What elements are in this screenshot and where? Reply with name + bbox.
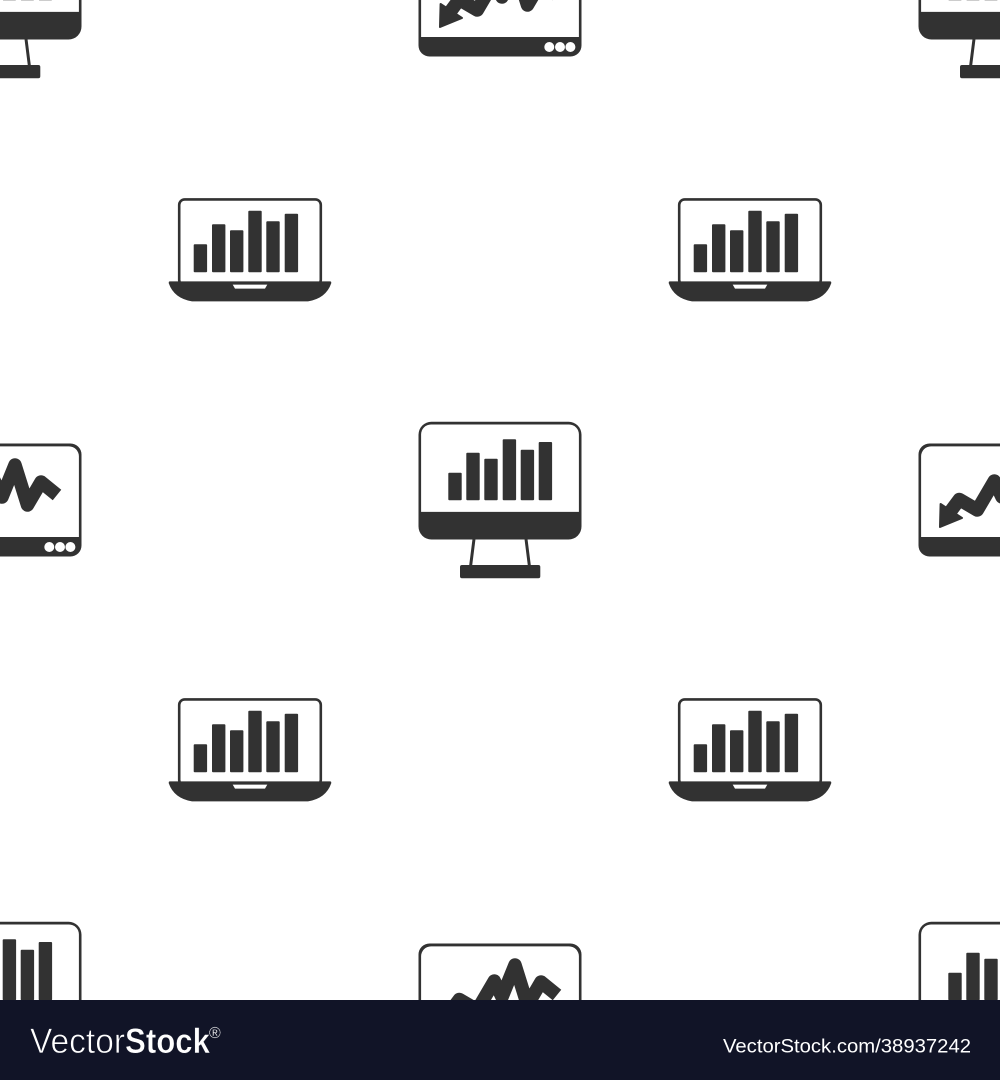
icon: monitor with bars, bottom left: [0, 922, 82, 1078]
icon: monitor with bars, top right: [918, 0, 1000, 78]
brand logo: Stock: [125, 1022, 210, 1061]
icon: monitor with bars, top left: [0, 0, 82, 78]
image id url: VectorStock.com/38937242: [723, 1037, 971, 1058]
icon: laptop with bars, upper right: [669, 199, 831, 301]
brand logo: Vector: [30, 1022, 125, 1061]
icon: laptop with bars, upper left: [169, 199, 331, 301]
icon: monitor with bars, centre: [418, 422, 582, 578]
icon: tablet with arrow chart, middle right: [918, 444, 1000, 556]
icon: monitor with bars, bottom right: [918, 922, 1000, 1078]
icon: tablet with arrow chart, bottom centre: [418, 944, 582, 1056]
footer bar: [0, 1000, 1000, 1080]
icon: tablet with arrow chart, top centre: [418, 0, 582, 56]
brand logo: [30, 1022, 221, 1061]
icon: laptop with bars, lower left: [169, 699, 331, 801]
brand logo: ®: [209, 1025, 221, 1042]
icon: laptop with bars, lower right: [669, 699, 831, 801]
icon: tablet with arrow chart, middle left: [0, 444, 82, 556]
